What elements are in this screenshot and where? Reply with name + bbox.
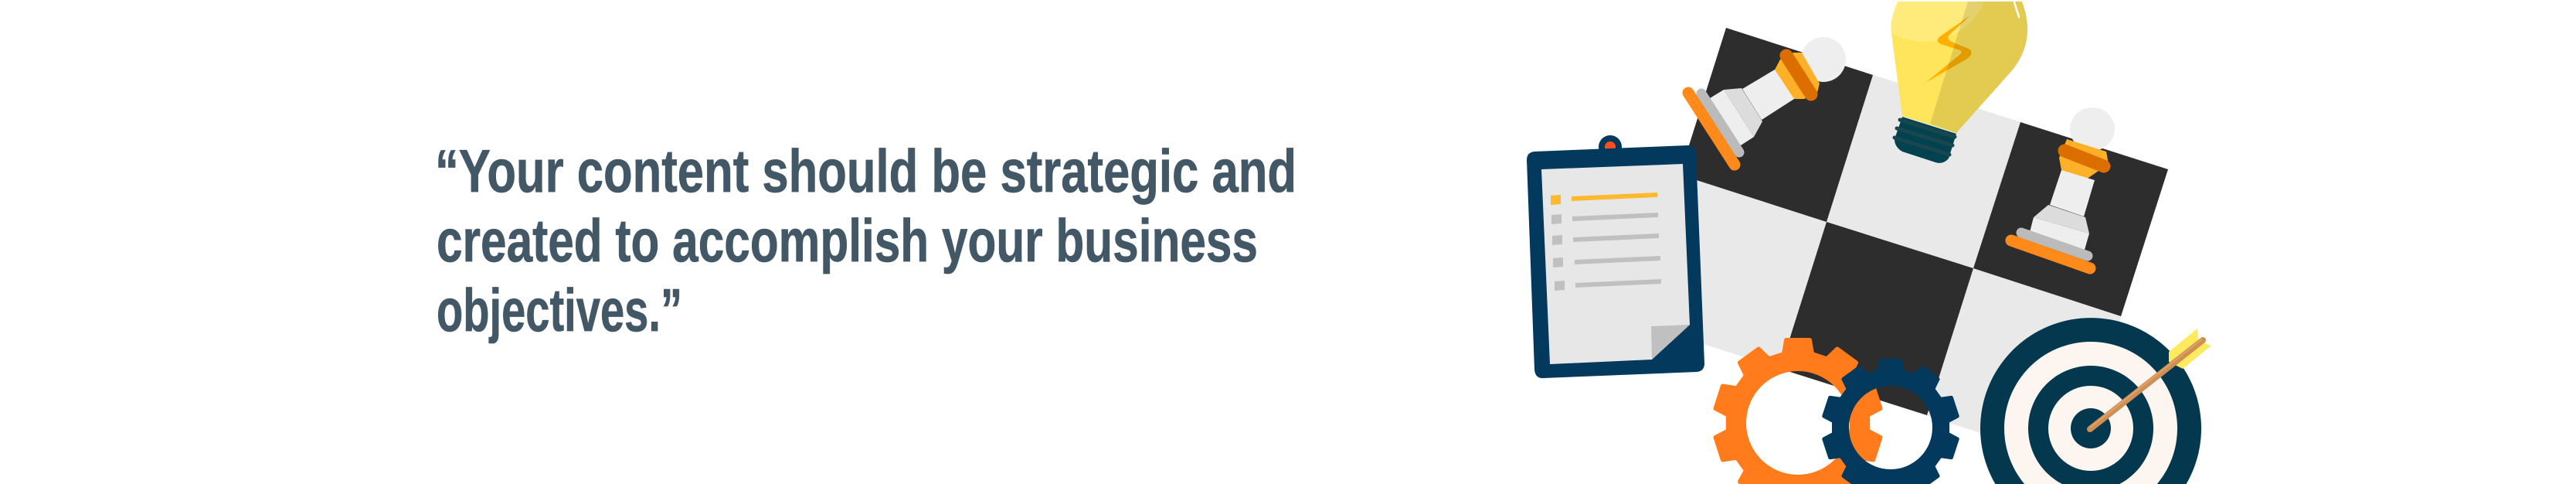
paper sheet: [1541, 164, 1690, 364]
quote text: “Your content should be strategic and: [435, 137, 1296, 205]
quote text: objectives.”: [437, 276, 682, 344]
bulb glass: [1891, 2, 2027, 133]
icon: standing chess pawn: [2011, 107, 2115, 268]
quote text: created to accomplish your business: [437, 206, 1258, 274]
bulb upper glow: [1891, 2, 1984, 42]
chess board: [1633, 28, 2168, 463]
clipboard body: [1527, 145, 1704, 378]
arrow fletching: [2169, 329, 2211, 369]
icon: orange gear: [1716, 340, 1880, 482]
clipboard pin: [1599, 135, 1622, 158]
checklist rows: [1551, 193, 1661, 291]
icon: light bulb: [1891, 2, 2027, 163]
quote text: [435, 137, 1296, 344]
bulb highlight: [2014, 2, 2019, 17]
target rings: [1980, 318, 2201, 484]
icon: clipboard checklist: [1527, 135, 1704, 378]
icon: navy gear: [1824, 360, 1957, 482]
folded page corner: [1651, 325, 1690, 360]
bulb shaded side: [1930, 2, 2027, 133]
arrow shaft: [2090, 339, 2203, 429]
icon: fallen chess pawn: [1688, 37, 1846, 165]
bulb screw base: [1895, 117, 1956, 163]
bulb lightning bolt: [1925, 15, 1972, 83]
icon: target with arrow: [1980, 318, 2211, 484]
